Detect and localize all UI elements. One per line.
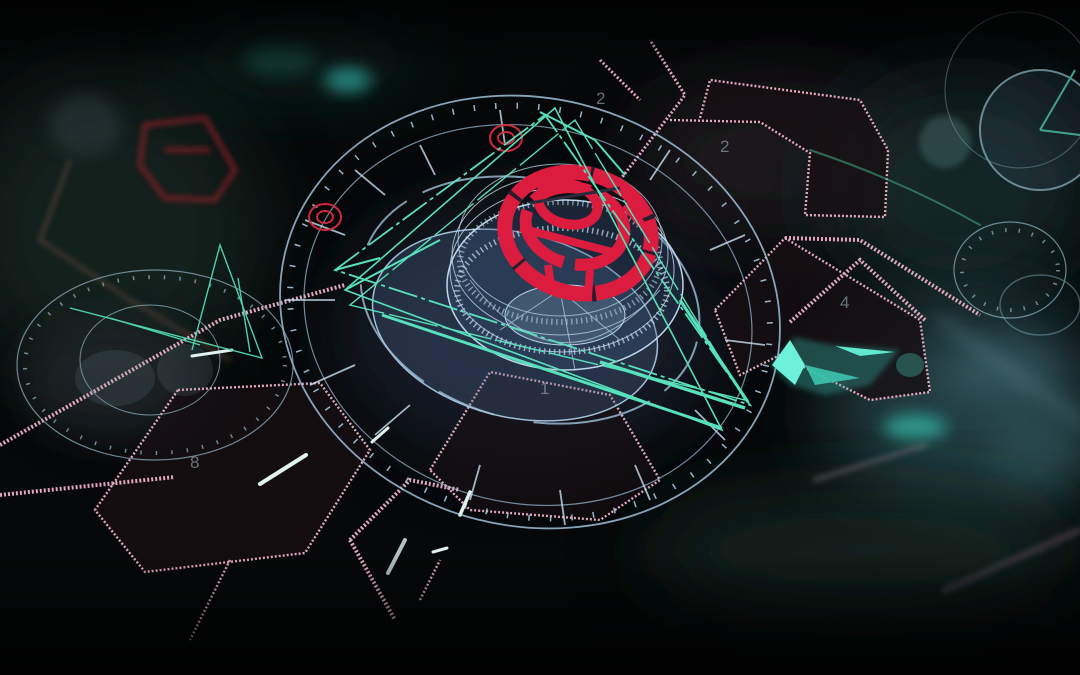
teal triangles bbox=[335, 108, 750, 430]
central sphere wireframe bbox=[447, 164, 683, 370]
grey gauge digits bbox=[190, 89, 849, 472]
blurred red ring, upper left bbox=[140, 118, 235, 200]
grey gauge digits: 1 bbox=[540, 379, 549, 398]
small left dial gauge bbox=[17, 270, 293, 460]
bright ticks bbox=[192, 350, 470, 573]
left teal triangle bbox=[70, 245, 262, 358]
grey gauge digits: 2 bbox=[596, 89, 605, 108]
large dial gauge bbox=[234, 43, 826, 581]
small red target icons bbox=[309, 125, 522, 230]
dial spokes bbox=[285, 110, 765, 525]
grey gauge digits: 4 bbox=[840, 293, 849, 312]
right dial fragments bbox=[945, 12, 1080, 335]
pale teal streaks, right bbox=[810, 150, 1080, 590]
red target emblem bbox=[492, 157, 664, 309]
blurred teal blobs bbox=[49, 44, 1080, 490]
grey gauge digits: 8 bbox=[190, 453, 199, 472]
teal glowing shard bbox=[770, 337, 924, 395]
blurred pink circuit, left bbox=[40, 160, 230, 360]
grey gauge digits: 2 bbox=[720, 137, 729, 156]
